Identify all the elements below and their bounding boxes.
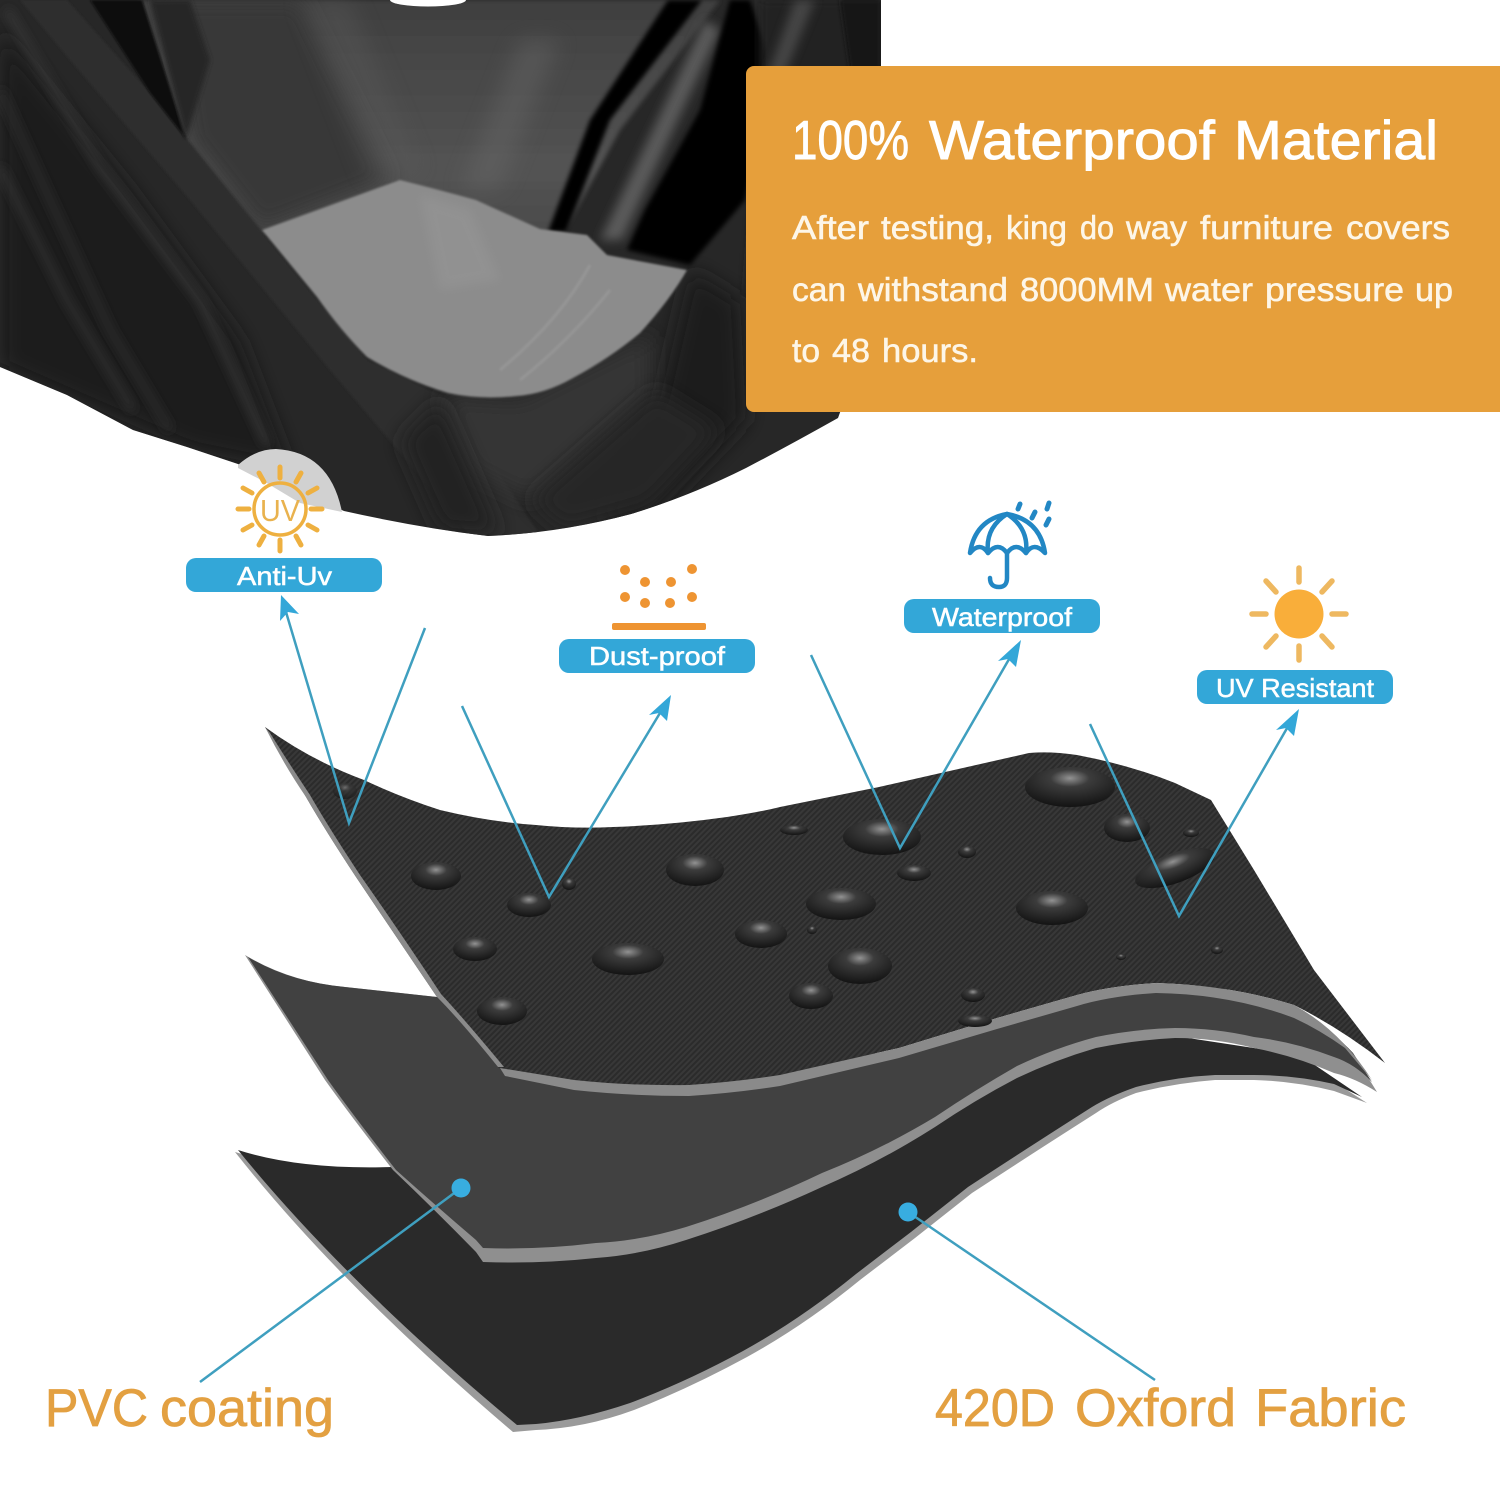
body text: furniture bbox=[1200, 209, 1333, 246]
heading: Material bbox=[1234, 109, 1438, 171]
body text: up bbox=[1415, 271, 1453, 308]
body text: 48 bbox=[832, 332, 870, 369]
body text: testing, bbox=[881, 209, 994, 246]
label: Waterproof bbox=[904, 599, 1100, 633]
UV lettering: UV bbox=[260, 493, 300, 528]
body text: do bbox=[1080, 209, 1114, 246]
body text bbox=[792, 209, 1453, 369]
heading: 100% bbox=[792, 109, 909, 171]
gray circle behind UV icon bbox=[238, 449, 342, 512]
body text: way bbox=[1125, 209, 1188, 246]
label: Dust-proof: Dust-proof bbox=[589, 641, 726, 671]
icon: dust particles bbox=[612, 564, 706, 630]
arrow: Waterproof bbox=[811, 640, 1021, 848]
icon: UV sun bbox=[238, 467, 322, 551]
label: PVC coating: PVC bbox=[45, 1379, 148, 1438]
label: PVC coating: coating bbox=[160, 1379, 334, 1438]
black slit top left bbox=[90, 0, 186, 139]
arrow: Dust-proof bbox=[462, 695, 671, 897]
panel: orange waterproof callout bbox=[746, 66, 1500, 412]
label: 420D Oxford Fabric: Oxford bbox=[1075, 1379, 1236, 1438]
icon: umbrella with rain bbox=[970, 503, 1049, 587]
hole at top of cover bbox=[390, 0, 466, 6]
pointer: PVC coating bbox=[200, 1178, 470, 1382]
water droplets bbox=[333, 767, 1223, 1027]
diagonal strap bbox=[166, 116, 538, 536]
light edge of top layer bbox=[500, 983, 1372, 1096]
fabric layer: middle PVC coating bbox=[245, 955, 1377, 1262]
black folds top right bbox=[548, 0, 702, 232]
label: 420D Oxford Fabric: Fabric bbox=[1255, 1379, 1406, 1438]
arrow: UV Resistant bbox=[1090, 709, 1299, 916]
arrow: Anti-Uv bbox=[280, 595, 425, 823]
icon: sun bbox=[1252, 568, 1346, 660]
body text: can bbox=[792, 271, 846, 308]
pillow inside cover bbox=[262, 180, 687, 397]
label: UV Resistant bbox=[1197, 670, 1393, 704]
fabric layer: bottom 420D Oxford bbox=[235, 1036, 1367, 1432]
lower folds under pillow bbox=[600, 270, 746, 530]
body text: After bbox=[792, 209, 869, 246]
body text: water bbox=[1164, 271, 1253, 308]
label: Anti-Uv bbox=[186, 558, 382, 592]
body text: king bbox=[1006, 209, 1067, 246]
product photo: black cover bbox=[0, 0, 881, 536]
label: Dust-proof bbox=[559, 639, 755, 673]
label: Anti-Uv: Anti-Uv bbox=[237, 561, 332, 591]
heading: Waterproof bbox=[929, 109, 1216, 171]
pointer: 420D Oxford Fabric bbox=[898, 1202, 1155, 1380]
body text: covers bbox=[1346, 209, 1450, 246]
body text: withstand bbox=[857, 271, 1008, 308]
label: Waterproof: Waterproof bbox=[932, 602, 1073, 632]
body text: pressure bbox=[1265, 271, 1404, 308]
label: 420D Oxford Fabric: 420D bbox=[935, 1379, 1055, 1438]
fabric layer: top with water droplets bbox=[265, 727, 1385, 1096]
body text: 8000MM bbox=[1020, 271, 1154, 308]
centre panel behind pillow bbox=[140, 0, 720, 240]
left side shading bbox=[0, 30, 290, 470]
label: UV Resistant: UV Resistant bbox=[1216, 673, 1375, 703]
body text: hours. bbox=[882, 332, 978, 369]
body text: to bbox=[792, 332, 820, 369]
